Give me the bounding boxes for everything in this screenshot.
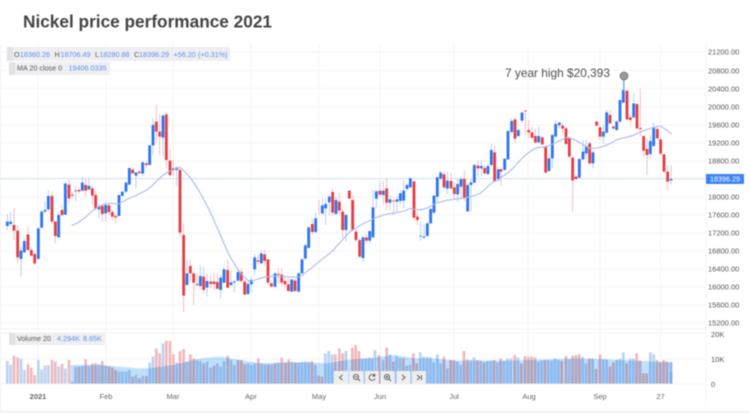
price axis: 15200.00	[708, 318, 739, 328]
time axis: Jun	[374, 392, 386, 401]
volume bars: January to May	[7, 341, 375, 384]
candlesticks: April to July	[251, 144, 498, 293]
legend: OHLC values: C	[134, 50, 139, 59]
price axis: 20800.00	[708, 66, 739, 76]
legend: moving average: 19406.0335	[68, 64, 106, 72]
price axis: 20000.00	[708, 102, 739, 112]
chart navigation buttons	[334, 371, 426, 384]
time axis	[30, 392, 665, 401]
volume chart	[7, 341, 672, 384]
volume legend: Volume 20	[17, 334, 51, 343]
legend: OHLC values: 18360.26	[20, 50, 50, 59]
legend: OHLC values: 18396.29	[139, 50, 169, 59]
price axis: 17600.00	[708, 210, 739, 220]
candlesticks: August to September	[501, 80, 671, 212]
annotation: 7 year high	[505, 66, 628, 92]
legend: OHLC values: O	[14, 50, 20, 59]
price axis: 21200.00	[708, 48, 739, 56]
volume legend: 8.65K	[83, 334, 102, 343]
legend: OHLC values: 18280.88	[100, 50, 129, 59]
price axis: 18000.00	[708, 192, 739, 202]
price axis: 17200.00	[708, 228, 739, 238]
legend: OHLC values	[7, 47, 230, 61]
price axis	[708, 48, 739, 328]
candlesticks: January to March	[7, 105, 248, 312]
price axis: 19600.00	[708, 120, 739, 130]
volume legend: 4.294K	[57, 334, 80, 343]
price axis: 16800.00	[708, 246, 739, 256]
price axis: 16000.00	[708, 282, 739, 292]
time axis: 2021	[30, 392, 46, 401]
time axis: 27	[656, 392, 665, 401]
last price line	[0, 178, 706, 180]
price axis: 19200.00	[708, 138, 739, 148]
time axis: May	[312, 392, 326, 401]
last price tag: 18396.29	[710, 174, 740, 184]
legend: OHLC values: H	[54, 50, 60, 59]
volume bars: June to September	[375, 347, 672, 384]
legend: moving average	[9, 62, 110, 75]
legend: OHLC values: (+0.31%)	[198, 50, 227, 59]
moving average line	[72, 126, 672, 282]
price axis: 16400.00	[708, 264, 739, 274]
volume legend	[9, 333, 105, 345]
legend: OHLC values: +56.20	[174, 50, 196, 59]
price axis: 18800.00	[708, 156, 739, 166]
annotation: 7 year high: 7 year high $20,393	[505, 66, 610, 80]
time axis: Feb	[100, 392, 112, 401]
volume axis: 10K	[711, 355, 724, 364]
price axis: 20400.00	[708, 84, 739, 94]
time axis: Jul	[449, 392, 459, 401]
time axis: Aug	[522, 392, 536, 401]
volume axis: 0	[711, 380, 715, 389]
price axis: 15600.00	[708, 300, 739, 310]
volume axis	[711, 330, 724, 389]
legend: moving average: MA 20 close 0	[17, 64, 62, 72]
time axis: Sep	[593, 392, 607, 401]
legend: OHLC values: 18706.49	[60, 50, 90, 59]
time axis: Apr	[245, 392, 257, 401]
time axis: Mar	[167, 392, 180, 401]
title: Nickel price performance 2021	[23, 12, 272, 32]
price chart	[0, 66, 706, 312]
legend: OHLC values: L	[95, 50, 99, 59]
volume axis: 20K	[711, 330, 724, 339]
